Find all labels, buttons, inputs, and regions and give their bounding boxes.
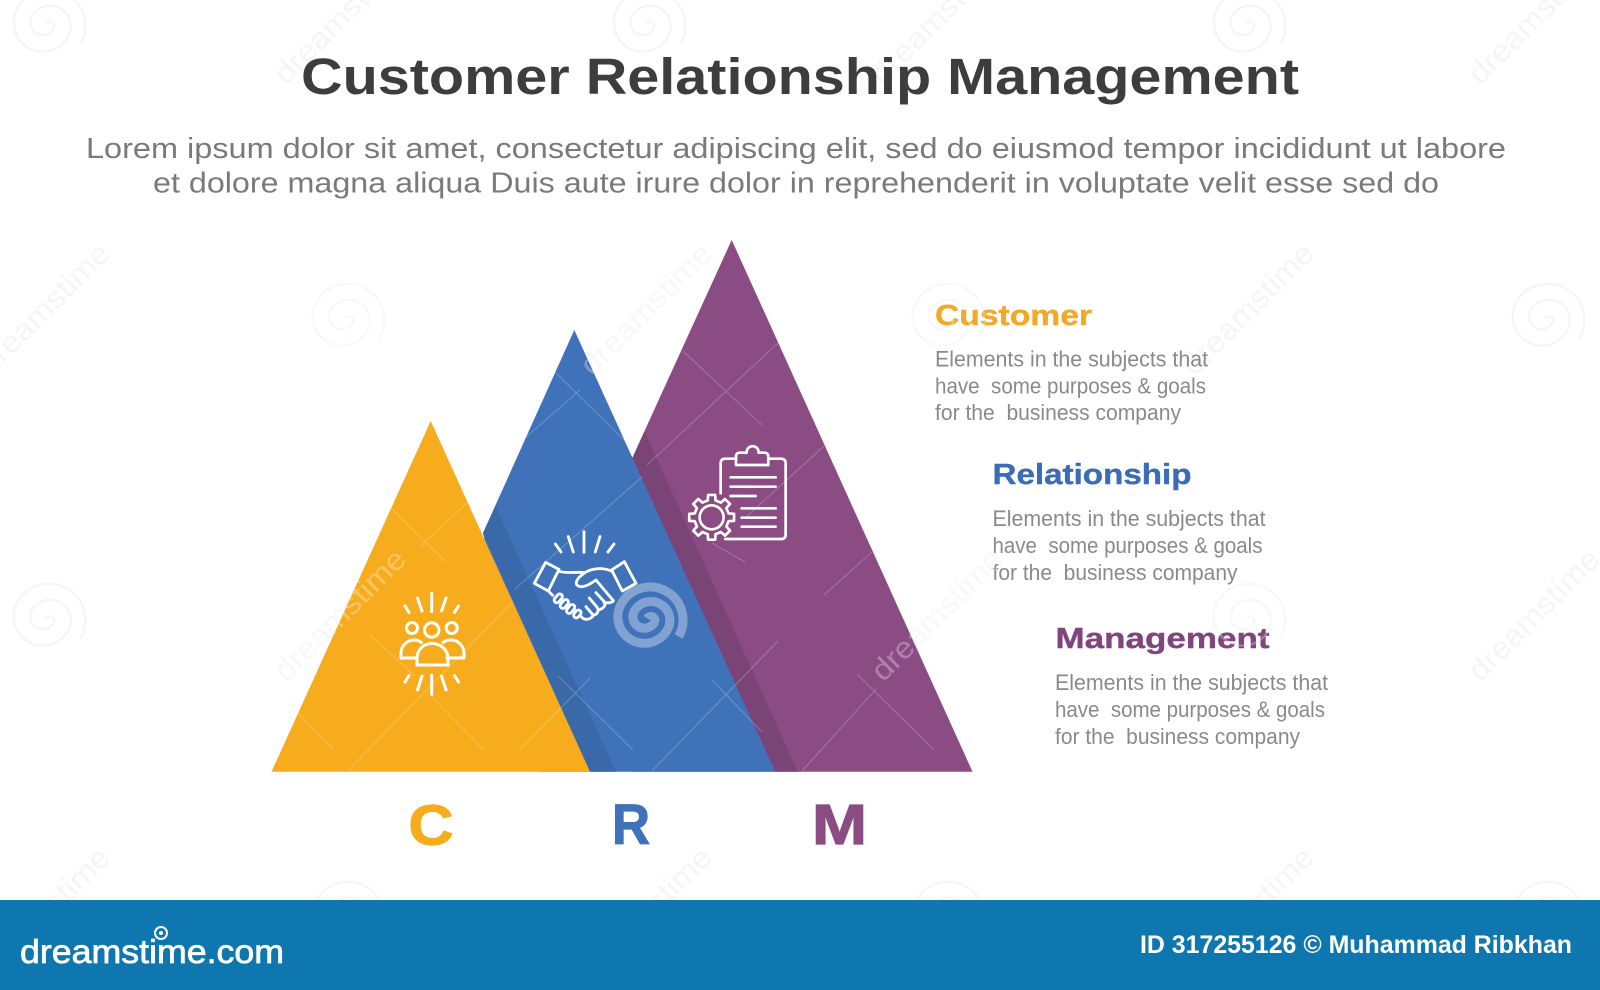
triangle shadow on blue: [483, 506, 616, 772]
text: dreamstime: [1176, 237, 1321, 382]
icon: people group: [401, 594, 464, 694]
description: Relationship: Elements in the subjects that: [992, 506, 1266, 531]
letter R: R: [612, 793, 650, 857]
triangle: relationship (blue): [483, 330, 775, 772]
heading: Customer: Customer: [935, 300, 1092, 332]
description: Management: Elements in the subjects that: [1055, 670, 1329, 695]
text: dreamstime: [865, 543, 1010, 688]
description: Customer: [935, 347, 1209, 425]
description: Customer: have some purposes & goals: [935, 374, 1206, 398]
description: Management: for the business company: [1055, 724, 1301, 749]
description: Relationship: have some purposes & goals: [992, 533, 1262, 558]
description: Customer: Elements in the subjects that: [935, 347, 1209, 372]
description: Customer: for the business company: [935, 400, 1182, 425]
footer logo: dreamstime.com: [20, 933, 284, 970]
footer credit: ID 317255126 © Muhammad Ribkhan: [1140, 931, 1572, 959]
panel: Management: [1055, 623, 1329, 749]
text: dreamstime: [574, 237, 719, 382]
text: dreamstime: [865, 543, 1010, 688]
text: dreamstime: [268, 543, 413, 688]
chart: three overlapping triangles: [272, 240, 972, 772]
panel: Customer: [935, 300, 1209, 425]
icon: clipboard with gear: [689, 446, 786, 540]
letter M: M: [812, 793, 867, 857]
icon: handshake: [534, 532, 636, 619]
description: Management: have some purposes & goals: [1055, 697, 1325, 722]
text: dreamstime: [574, 237, 719, 382]
subtitle text block: [86, 133, 1506, 200]
triangle: customer (yellow): [272, 421, 590, 772]
text: dreamstime: [1462, 543, 1600, 688]
description: Relationship: for the business company: [992, 560, 1238, 585]
description: Relationship: [992, 506, 1266, 585]
heading: Relationship: Relationship: [992, 459, 1192, 491]
subtitle text block: et dolore magna aliqua Duis aute irure dolor in reprehenderit in voluptate velit esse sed do: [153, 168, 1439, 200]
triangle: management (purple): [632, 240, 972, 772]
footer bar: [0, 900, 1600, 990]
heading: Management: Management: [1056, 623, 1270, 655]
letter C: C: [408, 794, 454, 858]
text: dreamstime: [574, 841, 719, 986]
watermark spiral: [608, 575, 695, 659]
description: Management: [1055, 670, 1329, 749]
panel: Relationship: [992, 459, 1266, 585]
text: dreamstime: [268, 543, 413, 688]
text: dreamstime: [1176, 841, 1321, 986]
triangle shadow on purple: [633, 431, 798, 772]
subtitle text block: Lorem ipsum dolor sit amet, consectetur adipiscing elit, sed do eiusmod tempor incididunt ut labore: [86, 133, 1506, 165]
title: Customer Relationship Management: [301, 48, 1299, 105]
